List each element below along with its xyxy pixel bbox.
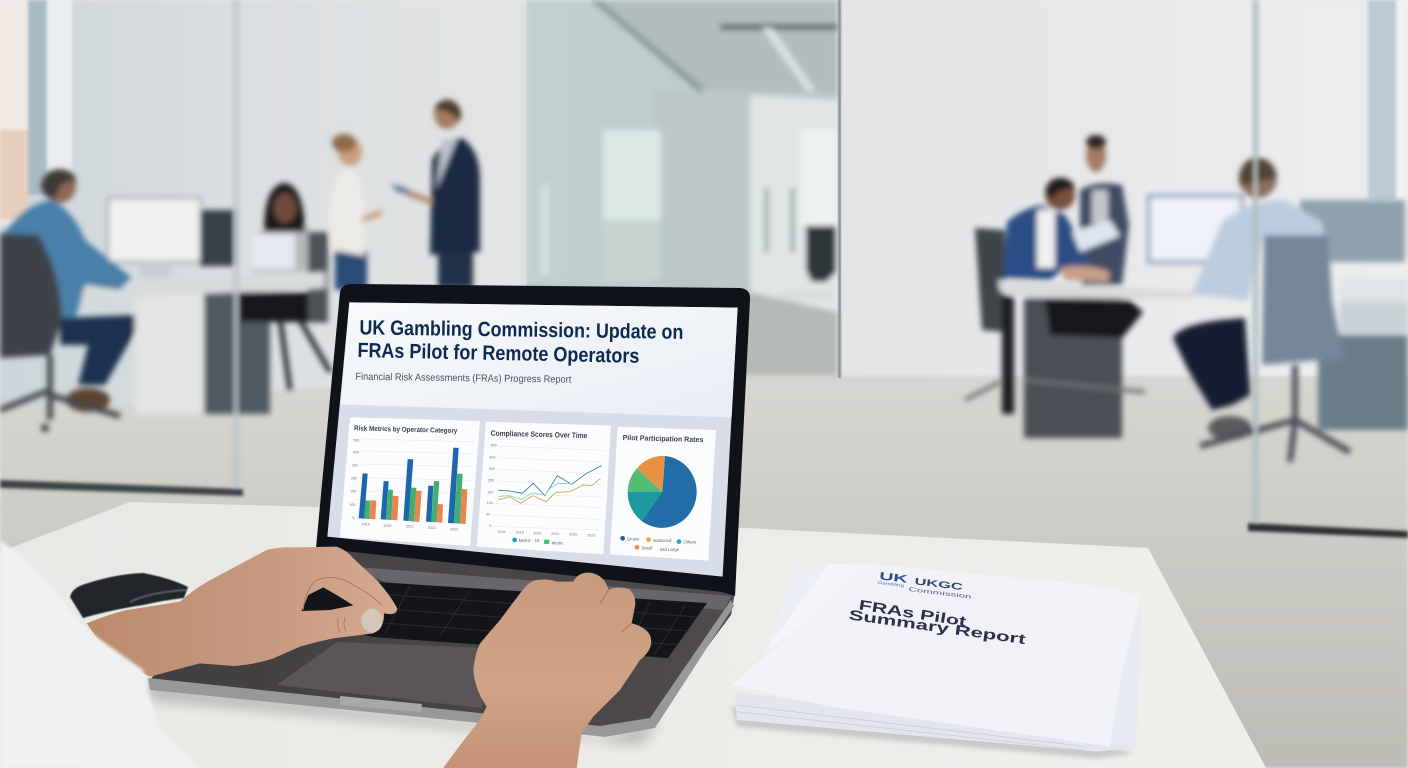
standing man bbox=[390, 99, 480, 288]
glass frames: centre bbox=[522, 0, 841, 378]
wall: middle bbox=[240, 0, 525, 392]
keyboard bbox=[325, 580, 707, 658]
wall: left room bbox=[0, 0, 240, 405]
mouse bbox=[70, 573, 188, 618]
report logo bbox=[877, 570, 973, 601]
card: bar chart: 400 bbox=[353, 450, 359, 454]
report title: Summary Report bbox=[848, 606, 1027, 647]
card: bar chart: 300 bbox=[352, 464, 358, 468]
window frame: right bbox=[1368, 0, 1408, 200]
people and desk: left group bbox=[0, 99, 480, 432]
deck strip bbox=[345, 566, 731, 610]
knuckle lines bbox=[600, 590, 632, 632]
table bbox=[0, 502, 1266, 768]
legend: Balanced bbox=[653, 538, 672, 543]
card: bar chart: 150 bbox=[350, 489, 356, 493]
printed reports bbox=[732, 563, 1142, 758]
background desk and panel bbox=[1300, 200, 1408, 430]
card: line chart: 2018 bbox=[497, 530, 505, 534]
chair bbox=[975, 228, 1005, 332]
desk top bbox=[78, 272, 325, 297]
legend: Metric · 10 bbox=[519, 538, 540, 543]
card: line chart: 0 bbox=[489, 524, 491, 528]
report title bbox=[848, 596, 1027, 647]
card: bar chart: 2020 bbox=[383, 524, 391, 528]
right hand and forearm bbox=[443, 573, 651, 768]
legend bbox=[620, 536, 696, 552]
bars bbox=[359, 448, 459, 523]
card: line chart: 300 bbox=[489, 467, 495, 471]
legend: Small bbox=[642, 545, 652, 550]
laptop base bbox=[148, 548, 735, 733]
screen bbox=[327, 302, 738, 577]
card: bar chart bbox=[340, 417, 480, 546]
card: line chart: 400 bbox=[489, 455, 495, 459]
thumbnail bbox=[361, 609, 383, 633]
keyboard gap between fingers bbox=[302, 587, 353, 611]
desk pedestal and top bbox=[965, 280, 1200, 438]
card: bar chart: 0 bbox=[352, 516, 354, 520]
standing woman bbox=[1080, 135, 1129, 285]
left hand and forearm bbox=[87, 547, 397, 677]
glass partition: left bbox=[0, 0, 243, 496]
card: bar chart: 2021 bbox=[406, 525, 414, 529]
monitors bbox=[108, 198, 235, 278]
table shadow bbox=[148, 684, 660, 745]
laptop lid bbox=[316, 284, 750, 596]
office chair: right bbox=[1200, 235, 1350, 462]
report cover bbox=[732, 563, 1140, 747]
knuckle lines bbox=[303, 578, 382, 633]
standing woman bbox=[329, 134, 382, 290]
card: bar chart: 2023 bbox=[450, 527, 458, 531]
card: line chart: 2023 bbox=[587, 533, 595, 537]
report logo: UKGC bbox=[914, 576, 964, 592]
card: bar chart: Risk Metrics by Operator Category bbox=[354, 425, 458, 435]
legend: Grows bbox=[627, 536, 639, 541]
card: line chart: 250 bbox=[488, 479, 494, 483]
seated woman bbox=[240, 183, 330, 390]
pie bbox=[628, 456, 697, 528]
card: line chart: 500 bbox=[491, 444, 497, 448]
glass wall: centre bbox=[525, 0, 838, 376]
screen header bbox=[341, 302, 738, 417]
card: line chart: 2020 bbox=[533, 531, 541, 535]
paper shadow bbox=[732, 707, 1135, 758]
monitor bbox=[1149, 196, 1242, 262]
base edge bbox=[148, 600, 734, 737]
card: bar chart: 250 bbox=[351, 477, 357, 481]
sleeve bbox=[0, 540, 200, 768]
seated man in blue suit bbox=[1003, 178, 1110, 282]
floor bbox=[0, 376, 1408, 768]
report logo: Gambling bbox=[877, 580, 904, 588]
under sheets bbox=[735, 564, 1142, 752]
screen title: UK Gambling Commission: Update on bbox=[359, 316, 684, 344]
people and desk: right group bbox=[965, 135, 1408, 462]
trackpad bbox=[277, 642, 485, 708]
legend: Others bbox=[683, 540, 696, 545]
seated man in blue shirt bbox=[5, 169, 135, 412]
card: pie chart bbox=[610, 427, 716, 561]
paper bbox=[1072, 220, 1120, 252]
legend: Mid Large bbox=[660, 547, 680, 552]
legend: Metric bbox=[552, 540, 564, 545]
seated man in light shirt bbox=[1173, 158, 1325, 440]
office chair: left bbox=[0, 233, 120, 432]
screen title: FRAs Pilot for Remote Operators bbox=[357, 339, 640, 368]
report logo: Commission bbox=[908, 587, 972, 601]
report logo: UK bbox=[879, 570, 909, 586]
wall: right bbox=[838, 0, 1408, 378]
card: line chart: 2022 bbox=[569, 533, 577, 537]
report title: FRAs Pilot bbox=[858, 596, 968, 629]
card: line chart: 150 bbox=[487, 490, 493, 494]
card: bar chart: 100 bbox=[349, 503, 355, 507]
card: line chart: Compliance Scores Over Time bbox=[491, 429, 587, 440]
screen title bbox=[357, 316, 684, 368]
screen subtitle: Financial Risk Assessments (FRAs) Progress Report bbox=[355, 372, 572, 386]
card: bar chart: 500 bbox=[353, 439, 359, 443]
card: bar chart: 2022 bbox=[428, 526, 436, 530]
card: pie chart: Pilot Participation Rates bbox=[623, 433, 703, 444]
card: line chart: 100 bbox=[487, 501, 493, 505]
legend bbox=[512, 538, 564, 545]
card: bar chart: 2019 bbox=[362, 523, 370, 527]
laptop bbox=[148, 284, 750, 745]
card: line chart: 2021 bbox=[551, 532, 559, 536]
card: line chart bbox=[477, 422, 611, 554]
glass partition: right bbox=[1248, 0, 1408, 538]
desk pedestal bbox=[135, 292, 205, 414]
card: line chart: 2019 bbox=[516, 531, 524, 535]
card: line chart: 50 bbox=[486, 513, 490, 517]
window: left bbox=[0, 0, 72, 225]
lines bbox=[498, 466, 602, 503]
